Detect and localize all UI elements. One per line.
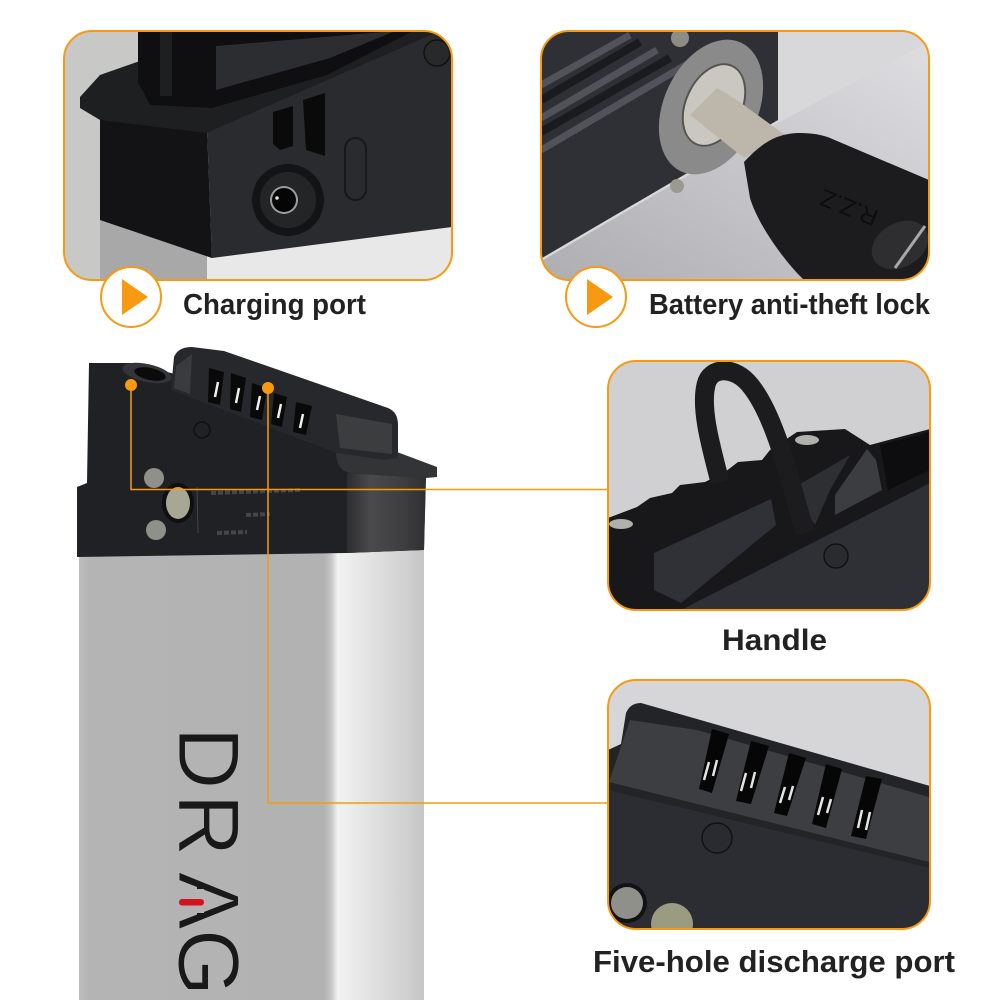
black housing (541, 31, 778, 258)
panel: handle (608, 361, 930, 610)
key blade (690, 88, 785, 158)
battery silver body (79, 548, 424, 1000)
wall background (541, 31, 929, 280)
key head (744, 133, 929, 280)
discharge port block (171, 347, 398, 460)
indent (702, 823, 732, 853)
top slot (880, 432, 930, 490)
icon: play badge lock (566, 267, 626, 327)
block end highlight (336, 414, 392, 454)
black housing (608, 703, 930, 929)
connector face (216, 31, 395, 90)
panel: five-hole discharge port (607, 680, 930, 945)
indent (824, 544, 848, 568)
lower plate (681, 483, 930, 610)
housing ribs (541, 35, 694, 150)
port band (609, 720, 929, 862)
collar right face (347, 473, 426, 553)
mounting hole (122, 362, 172, 384)
photo background (608, 680, 930, 929)
battery black side plate (77, 363, 426, 557)
white body (207, 225, 452, 280)
heading: charging port: Charging port (183, 289, 366, 321)
silver rail (100, 220, 207, 279)
callout line: handle (125, 379, 608, 490)
right face (207, 31, 452, 258)
lock ring (658, 40, 764, 174)
icon: play badge charging port (101, 267, 161, 327)
screws (607, 883, 647, 923)
key engraving: R.Z.Z (816, 183, 882, 231)
discharge port slots (208, 368, 312, 435)
callout line: discharge port (262, 382, 608, 803)
panel: charging port (64, 31, 452, 280)
table (543, 104, 928, 279)
panel border (64, 31, 452, 280)
connector top (138, 31, 413, 108)
photo background (65, 32, 212, 279)
front left face (100, 115, 212, 258)
main battery illustration (77, 347, 437, 1000)
heading: handle: Handle (722, 624, 827, 657)
screws and magnet (144, 468, 194, 540)
top flange (80, 31, 440, 133)
cap flange (336, 452, 437, 478)
screws (671, 32, 689, 47)
right wedge (835, 449, 882, 515)
charging socket (252, 164, 324, 236)
panel border (541, 31, 929, 280)
heading: five-hole discharge port: Five-hole discharge port (593, 944, 955, 979)
socket channels (273, 93, 325, 156)
key ring opening (872, 221, 928, 270)
logo letter gap (197, 889, 204, 913)
face right (790, 455, 850, 525)
corner indent (424, 40, 450, 66)
connector rib (160, 31, 172, 96)
brand name: DRAG (160, 727, 256, 996)
lower housing (608, 790, 930, 929)
panel: battery anti-theft lock (540, 23, 937, 280)
handle strap (704, 371, 805, 533)
capacity oval (345, 138, 366, 200)
black block (608, 429, 930, 610)
screws (795, 435, 819, 445)
block left dark (174, 354, 192, 394)
port slots (699, 729, 882, 839)
photo background (608, 361, 930, 610)
embossed label (194, 422, 300, 533)
front face (654, 499, 776, 603)
heading: battery anti-theft lock: Battery anti-theft lock (649, 289, 930, 321)
panel border (608, 361, 930, 610)
logo red accent (179, 899, 204, 906)
panel border (608, 680, 930, 929)
